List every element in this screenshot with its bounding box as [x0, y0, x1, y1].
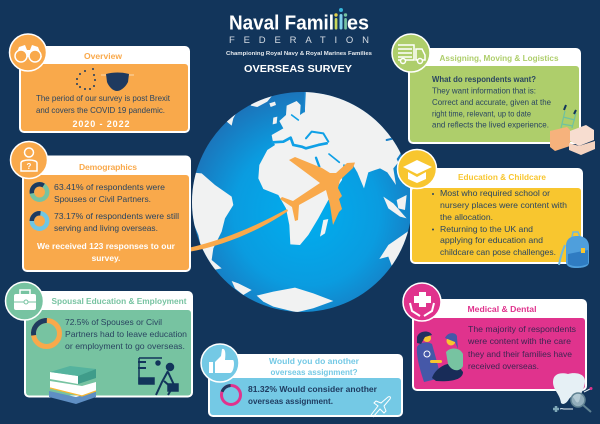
icon: delivery truck — [392, 34, 430, 72]
icon: thumbs up — [201, 344, 239, 382]
bulleted text: Most who required school or — [440, 188, 550, 198]
panel: another overseas assignment — [208, 354, 403, 417]
tagline: Championing Royal Navy & Royal Marines Families — [226, 51, 372, 57]
logo: es — [347, 12, 369, 34]
heading: spousal: Spousal Education & Employment — [52, 296, 187, 306]
callout: responses: We received 123 responses to our — [37, 241, 176, 251]
globe — [190, 83, 415, 312]
icon: medical hands — [403, 283, 441, 321]
bulleted text: nursery places were content with — [440, 200, 567, 210]
icon: person moving — [138, 358, 178, 395]
panel: demographics: serving and living overseas. — [54, 223, 158, 233]
icon: backpack — [559, 232, 589, 268]
icon: tooth and magnifier — [553, 373, 592, 412]
icon: books — [49, 366, 96, 404]
panel: assigning, moving and logistics: They want information that is: — [432, 86, 536, 96]
panel: medical and dental: received overseas. — [468, 361, 539, 371]
donut: 63.41% — [31, 183, 48, 201]
icon: plane outline — [371, 397, 390, 417]
bulleted text: the allocation. — [440, 212, 493, 222]
text: 81.32%: 81.32% Would consider another — [248, 384, 378, 394]
panel: overview: and covers the COVID 19 pandemic. — [36, 105, 165, 115]
donut: 72.5% — [32, 319, 61, 348]
icon: person question — [10, 142, 48, 178]
heading: overview: Overview — [84, 51, 122, 61]
text: 63.41%: 63.41% of respondents were — [54, 182, 165, 192]
heading: another assignment: Would you do another — [269, 356, 360, 366]
panel: spousal education and employment: or employment to go overseas. — [65, 341, 185, 351]
heading: medical: Medical & Dental — [468, 304, 536, 314]
icon: briefcase — [6, 282, 44, 320]
panel: another overseas assignment: overseas assignment? — [270, 367, 358, 377]
donut: 73.17% — [32, 213, 47, 229]
bulleted text: Returning to the UK and — [440, 224, 533, 234]
text: 72.5%: 72.5% of Spouses or Civil — [65, 317, 162, 327]
panel: education and childcare — [410, 168, 589, 268]
icon: EU stars — [76, 68, 96, 90]
panel: demographics — [22, 156, 191, 272]
panel: overview — [19, 46, 190, 133]
survey title: OVERSEAS SURVEY — [244, 63, 352, 75]
text: 73.17%: 73.17% of respondents were still — [54, 211, 179, 221]
text: medical: The majority of respondents — [468, 324, 576, 334]
bulleted text: childcare can pose challenges. — [440, 247, 556, 257]
panel: demographics: survey. — [92, 253, 120, 263]
text: respondents want: What do respondents want? — [432, 74, 536, 84]
panel: assigning, moving and logistics: right time, relevant, up to date — [432, 108, 531, 118]
panel: medical and dental — [412, 299, 592, 412]
icon: person question: ? — [27, 162, 32, 171]
panel: spousal education and employment — [24, 291, 193, 404]
logo — [226, 8, 372, 57]
icon: binoculars — [10, 34, 46, 71]
logo family figures — [334, 8, 347, 30]
panel: medical and dental: they and their families have — [468, 349, 572, 359]
panel: medical and dental: were content with the care — [467, 336, 571, 346]
panel: another overseas assignment: overseas assignment. — [248, 396, 333, 406]
heading: education: Education & Childcare — [458, 172, 546, 182]
date range: 2020 - 2022 — [72, 119, 130, 129]
flight trail — [188, 209, 288, 252]
heading: demographics: Demographics — [79, 162, 137, 172]
panel: demographics: Spouses or Civil Partners. — [54, 194, 151, 204]
bulleted text — [432, 188, 567, 257]
icon: hand truck and boxes — [550, 105, 595, 155]
icon: graduation cap — [398, 150, 436, 188]
logo wordmark: Naval Famil — [229, 12, 334, 34]
panel: assigning, moving and logistics: and reflects the lived experience. — [432, 120, 549, 130]
illustration: doctor and patient — [417, 331, 463, 382]
airplane — [280, 157, 355, 225]
panel: assigning, moving and logistics: Correct and accurate, given at the — [432, 97, 551, 107]
panel: spousal education and employment: Partners had to leave education — [65, 329, 187, 339]
panel: assigning, moving and logistics — [408, 48, 595, 155]
donut: 81.32% — [219, 383, 243, 407]
bulleted text: applying for education and — [440, 235, 543, 245]
heading: assigning: Assigning, Moving & Logistics — [440, 53, 559, 63]
icon: face mask — [101, 72, 134, 91]
logo subtitle: FEDERATION — [229, 35, 369, 46]
text: overview: The period of our survey is post Brexit — [36, 93, 171, 103]
